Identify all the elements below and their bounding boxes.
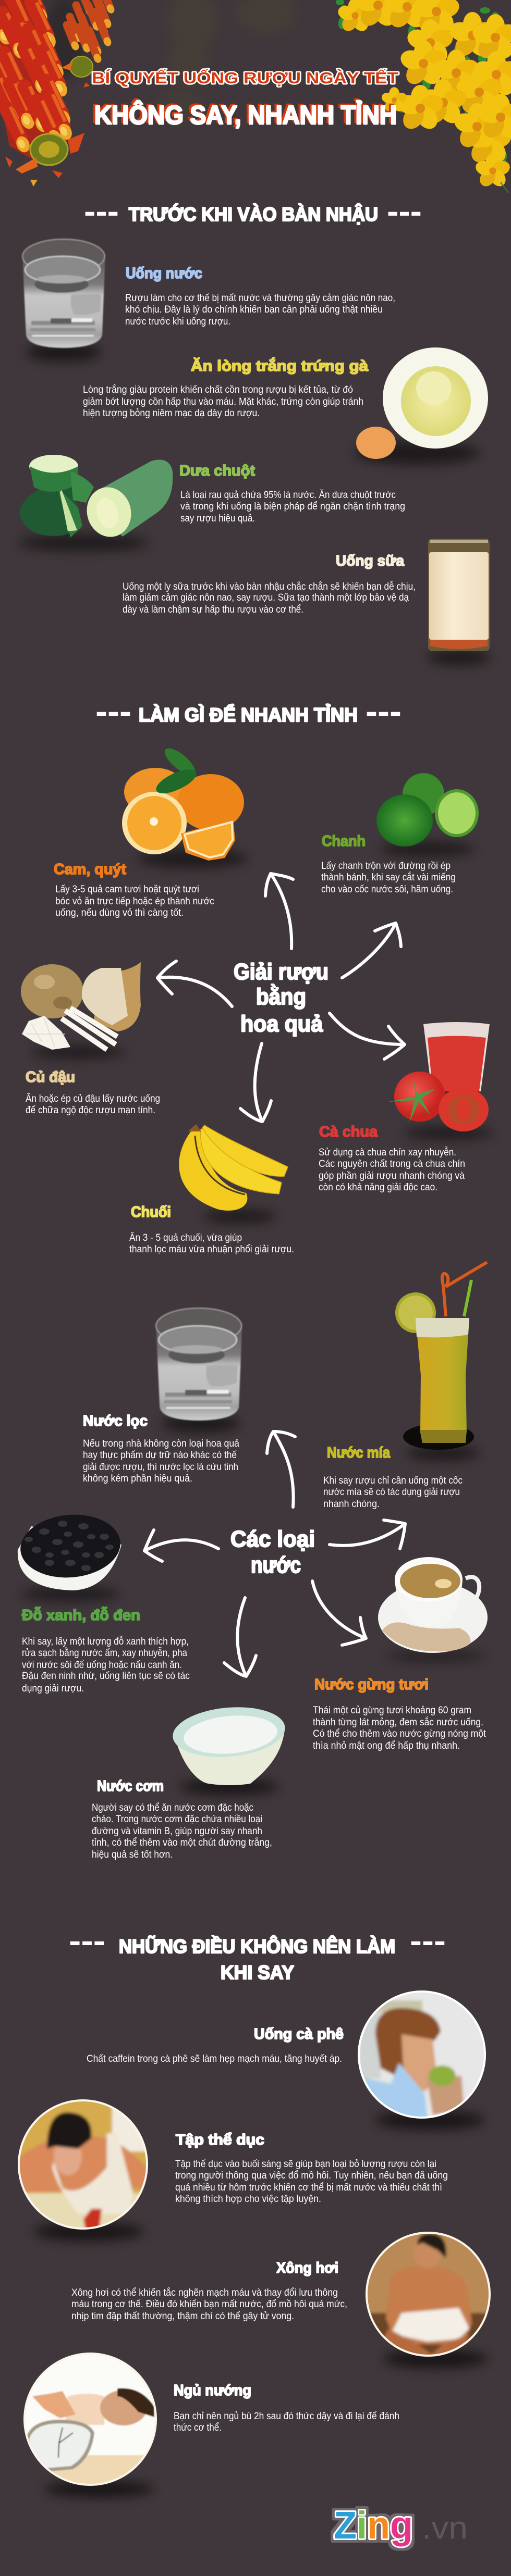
panel: ginger	[313, 1557, 488, 1751]
text: beans: Khi say, lấy một lượng đỗ xanh thích hợp,	[22, 1635, 189, 1647]
arrow: to filtered water	[267, 1432, 295, 1507]
image: bowl of egg white with egg	[355, 347, 488, 465]
text: tomato: còn có khả năng giải độc cao.	[319, 1181, 437, 1193]
heading: oversleeping: Ngủ nướng	[174, 2382, 251, 2399]
text: sauna: nhịp tim đập thất thường, thậm chí có thể gây tử vong.	[71, 2310, 294, 2322]
text: tomato	[319, 1146, 465, 1193]
text: rice water: đường và vitamin B, giúp người say nhanh	[92, 1825, 262, 1837]
section heading: before drinking: ---	[84, 194, 119, 229]
center label: fruit remedies	[234, 959, 328, 1037]
image: man drinking coffee	[352, 1985, 491, 2130]
text: jicama: Ăn hoặc ép củ đậu lấy nước uống	[26, 1092, 160, 1104]
text: lime: Lấy chanh trộn với đường rồi ép	[321, 860, 451, 872]
text: beans: rửa sạch bằng nước ấm, xay nhuyễn, pha	[22, 1647, 187, 1659]
heading: tomato: Cà chua	[319, 1124, 378, 1140]
image: bowl of black beans	[18, 1511, 123, 1601]
center label: types of drinks	[230, 1526, 315, 1578]
text: cucumber	[180, 489, 405, 524]
heading: ginger: Nước gừng tươi	[314, 1676, 429, 1693]
panel: jicama	[21, 962, 160, 1116]
firecrackers, large string	[0, 0, 84, 186]
text: oranges: Lấy 3-5 quả cam tươi hoặt quýt tươi	[55, 883, 199, 895]
section heading: what not to do: KHI SAY	[221, 1962, 294, 1983]
center label: types of drinks: Các loại	[230, 1526, 315, 1552]
image: cucumber	[18, 455, 173, 551]
arrow: to oranges	[265, 874, 293, 949]
panel: tomato	[319, 1022, 493, 1193]
panel: lime	[321, 773, 479, 895]
heading: beans: Đỗ xanh, đỗ đen	[22, 1606, 140, 1624]
text: oversleeping	[174, 2410, 399, 2433]
section heading: how to sober up: LÀM GÌ ĐỂ NHANH TỈNH	[139, 704, 358, 726]
text: banana: Ăn 3 - 5 quả chuối, vừa giúp	[129, 1231, 242, 1243]
text: oranges	[55, 883, 214, 918]
arrow: to banana	[240, 1043, 271, 1122]
text: ginger	[313, 1704, 486, 1751]
text: rice water	[92, 1802, 272, 1860]
text: filtered water	[83, 1438, 239, 1484]
center label: types of drinks: nước	[251, 1552, 301, 1578]
text: lime	[321, 860, 456, 895]
text: oranges: uống, nếu dùng vỏ thì càng tốt.	[55, 907, 184, 918]
text: banana	[129, 1231, 294, 1255]
logo: Zing.vn: .vn	[422, 2510, 468, 2545]
text: rice water: cháo. Trong nước cơm đặc chứa nhiều loại	[92, 1813, 262, 1825]
text: milk: Uống một ly sữa trước khi vào bàn nhậu chắc chắn sẽ khiến bạn dễ chịu,	[123, 580, 416, 592]
panel: sauna	[71, 2226, 496, 2368]
center label: fruit remedies: hoa quả	[240, 1011, 323, 1037]
text: exercise: Tập thể dục vào buổi sáng sẽ giúp bạn loại bỏ lượng rượu còn lại	[175, 2158, 436, 2170]
center label: fruit remedies: bằng	[256, 984, 306, 1010]
section heading: before drinking: ---	[387, 194, 422, 229]
text: beans: Đậu đen ninh nhừ, uống liên tục sẽ có tác	[22, 1670, 190, 1682]
heading: egg white: Ăn lòng trắng trứng gà	[191, 357, 369, 375]
text: lime: cho vào cốc nước sôi, hãm uống.	[321, 883, 453, 895]
text: cucumber: Là loại rau quả chứa 95% là nước. Ăn dưa chuột trước	[180, 489, 396, 501]
text: rice water: Người say có thể ăn nước cơm đặc hoặc	[92, 1802, 253, 1813]
firecrackers, small string	[62, 0, 116, 88]
text: exercise	[175, 2158, 448, 2205]
heading: rice water: Nước cơm	[97, 1778, 164, 1795]
heading: drink water: Uống nước	[126, 265, 202, 282]
panel: oversleeping	[18, 2347, 399, 2497]
text: rice water: hiệu quả sẽ tốt hơn.	[92, 1849, 173, 1860]
text: egg white	[83, 383, 363, 419]
section heading: what not to do: NHỮNG ĐIỀU KHÔNG NÊN LÀM	[119, 1935, 395, 1957]
text: oranges: bóc vỏ ăn trực tiếp hoặc ép thành nước	[55, 895, 214, 907]
section heading: what not to do: ---	[69, 1923, 105, 1958]
text: drink water	[125, 292, 395, 327]
text: filtered water: giải được rượu, thì nước lọc là cứu tinh	[83, 1461, 238, 1473]
text: beans: với nước sôi để uống hoặc nấu canh ăn.	[22, 1659, 182, 1671]
logo: Zing.vn: Zing	[334, 2504, 413, 2547]
image: limes	[376, 773, 479, 856]
section heading: what not to do	[69, 1923, 446, 1983]
image: man doing push-ups	[13, 2094, 154, 2241]
heading: milk: Uống sữa	[336, 553, 405, 569]
text: beans	[22, 1635, 190, 1694]
arrow: to rice water	[224, 1598, 256, 1676]
text: exercise: quá nhiều từ hôm trước khiến cơ thể bị mất nước và thiếu chất thì	[175, 2182, 442, 2193]
text: egg white: hiện tượng bỏng niêm mạc dạ dày do rượu.	[83, 407, 260, 419]
text: ginger: thìa nhỏ mật ong để hấp thụ nhanh.	[313, 1740, 460, 1751]
arrow: to sugarcane juice	[330, 1520, 405, 1549]
text: sauna	[71, 2286, 347, 2322]
heading: jicama: Củ đậu	[26, 1069, 75, 1086]
panel: drink water	[22, 239, 395, 362]
heading: filtered water: Nước lọc	[83, 1413, 148, 1429]
image: man in sauna	[360, 2226, 496, 2368]
text: tomato: Các nguyên chất trong cà chua chín	[319, 1158, 465, 1169]
image: jicama	[21, 962, 141, 1059]
text: coffee: Chất caffein trong cà phê sẽ làm hẹp mạch máu, tăng huyết áp.	[87, 2053, 342, 2064]
image: tomato juice and tomatoes	[388, 1022, 493, 1139]
heading: exercise: Tập thể dục	[176, 2132, 264, 2148]
text: drink water: Rượu làm cho cơ thể bị mất nước và thường gây cảm giác nôn nao,	[125, 292, 395, 304]
image: bananas	[179, 1124, 288, 1223]
text: beans: dụng giải rượu.	[22, 1683, 84, 1694]
text: milk	[123, 580, 416, 615]
text: jicama: để chữa ngộ độc rượu mạn tính.	[26, 1104, 155, 1116]
text: milk: làm giảm cảm giác nôn nao, say rượu. Sữa tạo thành một lớp bảo vệ dạ	[123, 592, 409, 603]
section heading: before drinking	[84, 194, 422, 229]
text: banana: thanh lọc máu vừa nhuận phổi giải rượu.	[129, 1243, 294, 1255]
panel: filtered water	[83, 1308, 242, 1484]
image: sugarcane juice glass	[395, 1262, 487, 1461]
panel: coffee	[87, 1985, 491, 2130]
faint background blossoms	[44, 0, 297, 122]
text: cucumber: say rượu hiệu quả.	[180, 513, 255, 524]
text: egg white: giảm bớt lượng cồn hấp thu vào máu. Mặt khác, trứng còn giúp tránh	[83, 396, 363, 407]
heading: sauna: Xông hơi	[276, 2260, 338, 2276]
image: glass of water	[22, 239, 105, 362]
arrow: to lime	[342, 923, 401, 978]
image: man sleeping with alarm clock	[18, 2347, 163, 2497]
text: jicama	[26, 1092, 160, 1116]
text: egg white: Lòng trắng giàu protein khiến chất cồn trong rượu bị kết tủa, từ đó	[83, 383, 353, 395]
text: drink water: khó chịu. Đây là lý do chính khiến bạn cần phải uống thật nhiều	[125, 304, 383, 315]
section heading: how to sober up: ---	[95, 694, 131, 729]
panel: banana	[129, 1124, 294, 1255]
text: sugarcane juice: nước mía sẽ có tác dụng giải rượu	[323, 1486, 460, 1498]
image: ginger tea	[378, 1557, 488, 1662]
text: filtered water: Nếu trong nhà không còn loại hoa quả	[83, 1438, 239, 1449]
text: sugarcane juice: nhanh chóng.	[323, 1498, 380, 1510]
arrow: to jicama	[157, 961, 232, 1006]
apricot blossom branches	[336, 0, 511, 193]
image: glass of water	[156, 1308, 242, 1432]
text: exercise: trong người thông qua việc đổ mồ hôi. Tuy nhiên, nếu bạn đã uống	[175, 2170, 448, 2181]
text: oversleeping: thức cơ thể.	[174, 2422, 222, 2433]
heading: sugarcane juice: Nước mía	[327, 1445, 391, 1461]
panel: beans	[18, 1511, 190, 1694]
image: bowl of rice water	[171, 1703, 287, 1795]
section heading: how to sober up: ---	[366, 694, 402, 729]
text: lime: thành bánh, khi say cắt vài miếng	[321, 871, 456, 883]
text: sugarcane juice	[323, 1475, 463, 1510]
panel: sugarcane juice	[323, 1262, 487, 1510]
panel: milk	[123, 539, 490, 665]
text: exercise: không thích hợp cho việc tập luyện.	[175, 2193, 321, 2205]
heading: lime: Chanh	[322, 833, 366, 850]
arrow: to ginger	[312, 1581, 366, 1645]
text: tomato: Sử dụng cà chua chín xay nhuyễn.	[319, 1146, 456, 1158]
center label: fruit remedies: Giải rượu	[234, 959, 328, 985]
panel: egg white	[83, 347, 488, 465]
heading: banana: Chuối	[131, 1204, 171, 1221]
section heading: what not to do: ---	[410, 1923, 446, 1958]
text: sugarcane juice: Khi say rượu chỉ cần uống một cốc	[323, 1475, 463, 1486]
title line 1: BÍ QUYẾT UỐNG RƯỢU NGÀY TẾT	[92, 68, 398, 87]
heading: coffee: Uống cà phê	[254, 2026, 344, 2043]
text: ginger: Có thể cho thêm vào nước gừng nóng một	[313, 1728, 486, 1739]
panel: oranges	[54, 744, 248, 918]
text: sauna: máu trong cơ thể. Điều đó khiến bạn mất nước, đổ mồ hôi quá mức,	[71, 2298, 347, 2310]
text: drink water: nước trước khi uống rượu.	[125, 316, 230, 327]
arrow: to tomato	[330, 1013, 405, 1059]
panel: exercise	[13, 2094, 448, 2241]
image: oranges	[122, 744, 248, 868]
title line 2: KHÔNG SAY, NHANH TỈNH	[94, 100, 397, 130]
panel: rice water	[92, 1703, 287, 1860]
text: filtered water: hay thực phẩm dự trữ nào khác có thể	[83, 1449, 237, 1461]
text: sauna: Xông hơi có thể khiến tắc nghẽn mạch máu và thay đổi lưu thông	[71, 2286, 338, 2298]
text: oversleeping: Bạn chỉ nên ngủ bù 2h sau đó thức dậy và đi lại để đánh	[174, 2410, 399, 2422]
arrow: to beans	[144, 1530, 218, 1561]
text: cucumber: và trong khi uống là biện pháp để ngăn chặn tình trạng	[180, 501, 405, 512]
text: tomato: góp phần giải rượu nhanh chóng và	[319, 1170, 465, 1181]
logo: Zing.vn	[334, 2504, 468, 2547]
section heading: before drinking: TRƯỚC KHI VÀO BÀN NHẬU	[129, 203, 378, 225]
text: filtered water: không kém phần hiệu quả.	[83, 1473, 192, 1484]
image: glass of milk	[428, 539, 490, 665]
heading: oranges: Cam, quýt	[54, 861, 126, 878]
heading: cucumber: Dưa chuột	[179, 463, 255, 479]
text: milk: dày và làm chậm sự hấp thu rượu vào cơ thể.	[123, 604, 303, 615]
section heading: how to sober up	[95, 694, 402, 729]
panel: cucumber	[18, 455, 405, 551]
text: ginger: Thái một củ gừng tươi khoảng 60 gram	[313, 1704, 471, 1716]
text: rice water: tỉnh, có thể thêm vào một chút đường trắng,	[92, 1836, 272, 1848]
text: ginger: thành từng lát mỏng, đem sắc nước uống.	[313, 1716, 483, 1728]
